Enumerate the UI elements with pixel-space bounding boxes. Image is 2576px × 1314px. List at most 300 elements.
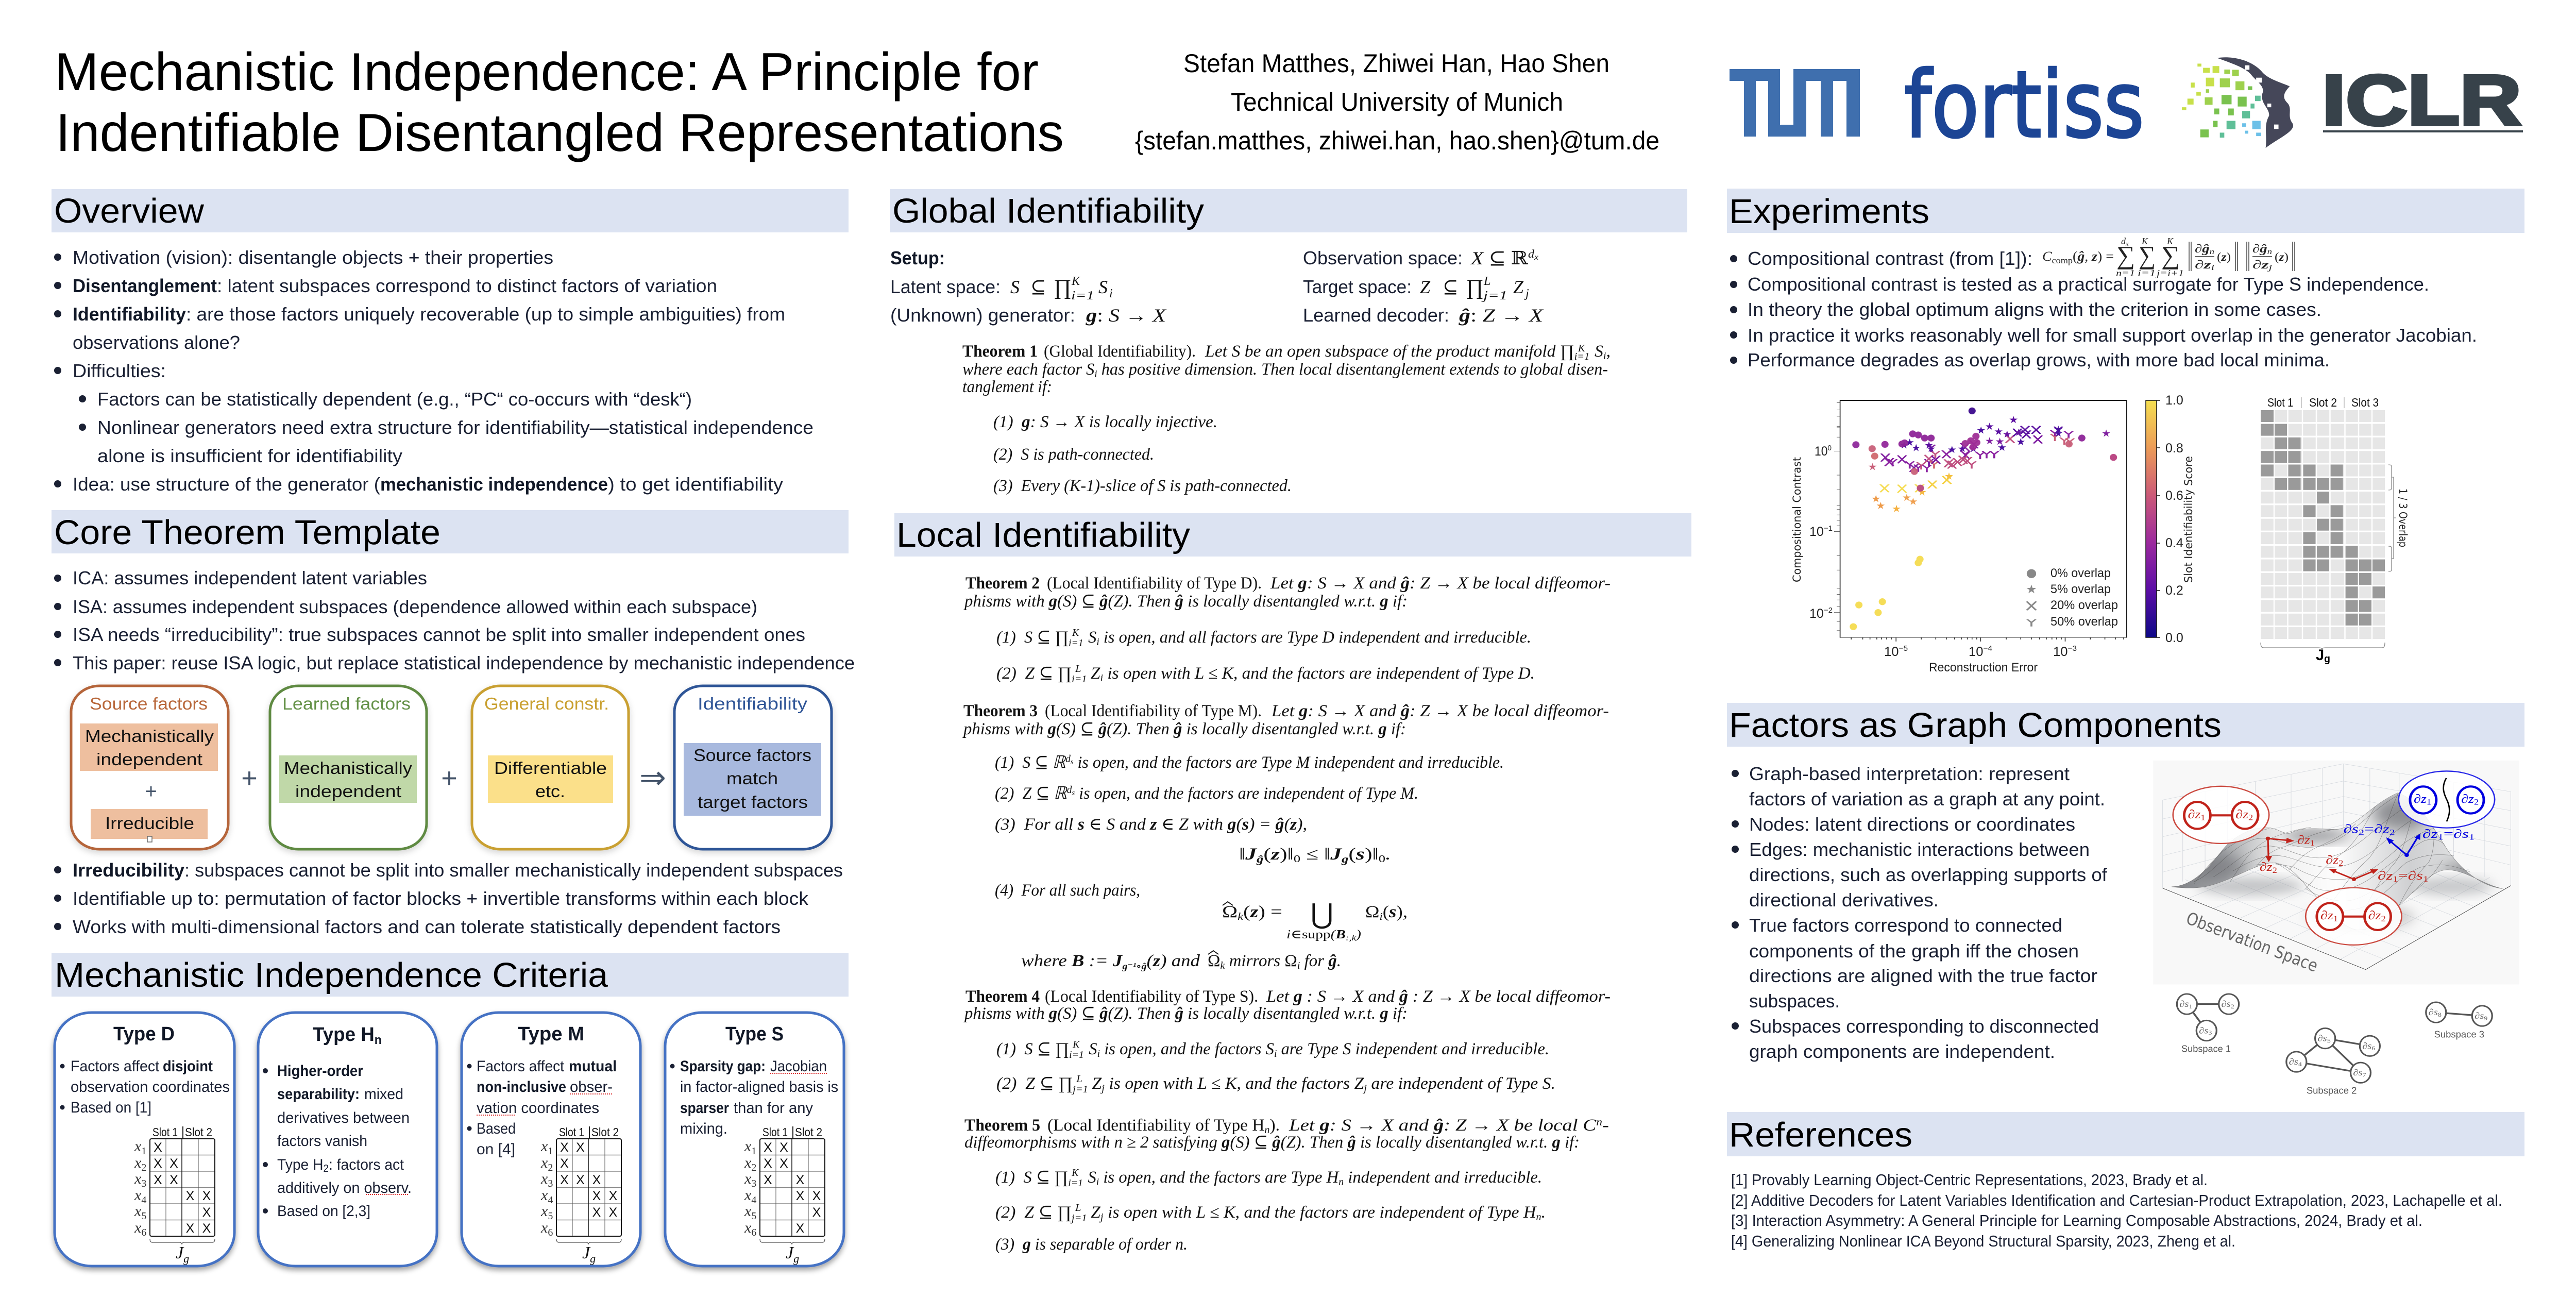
overview bullet list: Factors can be statistically dependent (e.g., “PC“ co-occurs with “desk“) [97,389,692,410]
red arrows and labels: ∂z [2297,833,2310,847]
theorem 3: Let g: S → X and ĝ: Z → X be local diffeomor- [1271,702,1609,720]
logo: TUM [1730,69,1860,137]
setup definitions: Setup: [890,247,945,268]
box: source factors [71,686,228,849]
jacobian matrix: type M: X [592,1189,601,1203]
jacobian matrix: type S: X [764,1156,772,1171]
markers: 5% overlap [1869,416,2110,512]
theorem 2: (1) S ⊆ ∏ [996,628,1070,647]
blue arrows and labels: = [2364,822,2374,836]
x axis tick labels: −5 [1899,644,1908,653]
jacobian matrix: type D: X [202,1221,211,1236]
theorem 4: is open with L ≤ K, and the factors Z [1105,1074,1364,1093]
setup definitions [890,247,1544,326]
theorem 5: (Local Identifiability of Type H [1047,1116,1262,1135]
formula: compositional contrast [2042,236,2295,278]
theorem 3: ( [1243,903,1250,921]
bullet list: ICA and ISA: This paper: reuse ISA logic, but replace statistical independence by mechanistic independence [73,652,855,673]
blue arrows and labels: ∂s [2453,827,2466,840]
jacobian matrix: type S: X [796,1221,805,1236]
setup definitions: X ⊆ ℝ [1471,248,1524,268]
bullet list: irreducibility: Identifiable up to: permutation of factor blocks + invertible transforms within each block [73,888,809,909]
jacobian matrix: type M: 2 [548,1162,553,1173]
card: type S: Jacobian [770,1058,827,1075]
label: observation space: Observation Space [2183,908,2321,976]
overview bullet list: observations alone? [73,332,240,353]
jacobian matrix: type M: X [560,1156,569,1171]
graph: subspace 1: 1 [2189,1003,2192,1010]
formula: compositional contrast: (z) [2275,250,2289,263]
jacobian matrix: type M: x [541,1187,548,1204]
jacobian matrix: type S: g [793,1252,799,1265]
theorem 5: (3) g is separable of order n. [995,1235,1188,1254]
theorem 1: where each factor S [962,360,1097,379]
theorem 5: K [1071,1167,1079,1178]
reference list: [1] Provably Learning Object-Centric Representations, 2023, Brady et al. [1731,1171,2208,1189]
theorem 4: j [1100,1083,1105,1094]
theorem 3: g [1341,854,1348,865]
blue arrows and labels: 1 [2469,833,2475,841]
reference list [1731,1171,2502,1250]
colorbar: slot identifiability score: 0.4 [2165,536,2183,550]
heading: experiments [1727,189,2524,233]
blue arrows and labels: 2 [2359,828,2364,837]
x axis tick labels: −3 [2067,644,2077,653]
theorem 3: ( [1147,952,1154,970]
jacobian matrix: type M [540,1124,621,1265]
setup definitions: ĝ: Z → X [1459,305,1544,326]
jacobian matrix: type D: x [134,1170,141,1187]
formula: compositional contrast: ( [2073,249,2077,264]
theorem 3: is open, and the factors are Type M independent and irreducible. [1074,753,1504,772]
setup definitions: Learned decoder: [1303,305,1449,326]
blue ring: disconnected graph: 1 [2427,798,2431,806]
panel: references [1727,1112,2524,1250]
jacobian matrix: type D: 5 [141,1210,146,1222]
red ring: connected graph front [2306,888,2402,945]
jacobian matrix: type D: x [134,1203,141,1220]
theorem 3: is open, and the factors are independent of Type M. [1075,784,1418,803]
theorem 4: Z [1088,1074,1102,1093]
authors and affiliation: Technical University of Munich [1231,88,1563,116]
theorem 5: Let g: S → X and ĝ: Z → X be local C [1289,1116,1573,1135]
theorem 2: i=1 [1069,637,1083,649]
card: type S: in factor-aligned basis is [680,1079,838,1096]
jacobian matrix: type D: x [134,1138,141,1155]
box: source factors: + [145,780,157,803]
theorem 3: ĝ [1256,854,1263,865]
title [55,42,1064,163]
blue ring: disconnected graph: ∂z [2461,792,2474,805]
experiments bullet list: Compositional contrast (from [1]): [1748,248,2032,269]
theorem 2: S [1084,628,1096,647]
theorem 5: is open, and the factors are Type H [1099,1168,1340,1187]
theorem 3: 0 [1379,853,1385,865]
box: identifiability: target factors [698,793,808,812]
formula: compositional contrast: n [2267,248,2272,256]
card: type H_n: 2 [324,1163,329,1174]
graph: subspace 2: 5 [2327,1037,2331,1044]
card: type S: Type S [725,1023,784,1045]
formula: compositional contrast: n=1 [2116,268,2135,278]
x axis tick labels: 10 [1969,645,1983,659]
graph: subspace 2: ∂s [2362,1041,2371,1051]
jacobian matrix: type M: x [541,1154,548,1171]
graph: subspace 2: ∂s [2318,1034,2327,1043]
setup definitions: ⊆ [1443,277,1458,297]
heading: overview: Overview [54,192,205,230]
theorem 3: for [1300,952,1328,970]
bullet list: irreducibility: Works with multi-dimensional factors and can tolerate statistically dependent factors [73,916,781,937]
chart: scatter plot of compositional contrast vs reconstruction error [1791,393,2195,675]
heading: core theorem template [52,510,849,553]
theorem 1: K [1578,343,1586,354]
heading: global identifiability: Global Identifiability [892,192,1205,230]
jacobian matrix: type D: g [183,1252,189,1265]
chart: generator jacobian support matrix [2261,396,2409,665]
card: type M: non-inclusive [477,1079,566,1096]
theorem 3: (3) For all s ∈ S and z ∈ Z with g(s) = ĝ(z), [995,815,1307,834]
theorem 4: j=1 [1071,1084,1088,1095]
card: type H_n: separability: [277,1086,360,1103]
theorem 1: (2) S is path-connected. [993,445,1154,464]
jacobian matrix: type S: 1 [751,1145,756,1157]
theorem 1: S [1590,342,1603,361]
heading: overview [52,189,849,232]
theorem 3: d [1067,784,1072,796]
box: learned factors: independent [295,782,401,801]
jacobian matrix: type M: X [560,1173,569,1187]
colorbar: slot identifiability score: Slot Identifiability Score [2182,456,2195,583]
markers: 20% overlap [1880,426,2042,493]
logo: ICLR: ICLR [2322,61,2521,140]
theorem 4: i [1274,1048,1277,1059]
box: general constraints [472,686,629,849]
slot headers [2267,396,2379,409]
box: identifiability: Source factors [693,746,811,765]
theorem 5: i [1096,1176,1099,1188]
jacobian matrix: type S: | [791,1124,794,1138]
red ring: connected graph front: ∂z [2320,908,2333,922]
theorem 2: L [1075,663,1081,675]
theorem 3: ĝ. [1328,952,1341,970]
overview bullet list: Disentanglement [73,275,217,296]
blue arrows and labels: ∂s [2343,822,2356,836]
graph: subspace 2: 7 [2363,1071,2366,1079]
formula: compositional contrast: ∂ z [2252,258,2266,271]
blue ring: disconnected graph [2399,771,2495,828]
jacobian matrix: type S: X [796,1189,805,1203]
setup definitions: i=1 [1071,289,1094,302]
jacobian matrix: type S: X [779,1140,788,1155]
theorem 3: Ω [1208,952,1220,970]
theorem 1: i=1 [1574,351,1589,362]
theorem 3: g⁻¹∘ĝ [1122,961,1147,971]
jacobian matrix: type S: Slot 1 [762,1125,788,1139]
theorem 3: s)‖ [1356,845,1375,864]
theorem 1: has positive dimension. Then local disentanglement extends to global disen- [1097,360,1608,379]
theorem 4: (Local Identifiability of Type S). [1045,987,1258,1006]
jacobian matrix: type S: x [744,1187,751,1204]
card: type S: than for any [734,1100,813,1117]
red arrows and labels: 1 [2393,874,2398,883]
jacobian matrix: type D: 3 [141,1178,146,1189]
jacobian matrix: type D: 2 [141,1162,146,1173]
theorem 5: n [1264,1124,1270,1136]
graph: subspace 1: ∂s [2199,1026,2208,1036]
legend labels: 0% overlap [2050,566,2111,580]
box: identifiability: Identifiability [698,694,808,713]
jacobian matrix: type M: Slot 1 [559,1125,584,1139]
jacobian matrix: type M: | [588,1124,591,1138]
theorem 3: k [1220,960,1225,971]
card: type M: Type M [518,1023,584,1045]
jacobian matrix: type D: X [170,1156,178,1171]
theorem 5: ). [1270,1116,1280,1135]
reference list: [4] Generalizing Nonlinear ICA Beyond Structural Sparsity, 2023, Zheng et al. [1731,1232,2235,1250]
graph: subspace 1: Subspace 1 [2181,1044,2231,1054]
formula: compositional contrast: ∑ [2139,241,2156,269]
wall and floor grid [2163,764,2511,959]
bullet list: ICA and ISA: ICA: assumes independent latent variables [73,567,427,588]
legend labels [2050,566,2118,629]
legend labels: 20% overlap [2050,598,2118,612]
box: source factors: Irreducible [105,814,194,833]
card: type H_n: mixed [364,1086,403,1103]
theorem 5: (2) Z ⊆ ∏ [995,1203,1070,1222]
panel: experiments [1727,189,2524,675]
surface mesh [2194,794,2470,917]
blue arrows and labels: ∂z [2422,827,2435,840]
theorem 2: (2) Z ⊆ ∏ [996,664,1071,683]
formula: compositional contrast: x [2125,240,2129,247]
theorem 1: Let S be an open subspace of the product manifold ∏ [1205,342,1567,361]
theorem 5: - [1602,1116,1609,1135]
bullet list: ICA and ISA: ISA: assumes independent subspaces (dependence allowed within each subspace) [73,596,757,617]
box: identifiability: match [726,769,778,788]
theorem 3: J [1330,845,1343,864]
card: type M: on [4] [477,1141,515,1158]
colorbar: slot identifiability score: 0.6 [2165,488,2183,503]
reference list: [2] Additive Decoders for Latent Variables Identification and Cartesian-Product Extrapolation, 2023, Lachapelle et al. [1731,1191,2502,1209]
theorem 2: Let g: S → X and ĝ: Z → X be local diffeomor- [1270,574,1611,593]
logo: fortiss: fortiss [1904,52,2144,158]
card: type H_n: n [375,1033,382,1047]
setup definitions: Latent space: [890,276,1001,297]
overview bullet list: : are those factors uniquely recoverable (up to simple ambiguities) from [186,304,785,325]
bullet list: ICA and ISA: ISA needs “irreducibility”: true subspaces cannot be split into smaller independent ones [73,624,805,645]
blue ring: disconnected graph: ∂z [2414,792,2427,805]
y axis tick labels: 10 [1809,607,1824,621]
jacobian matrix: type M: X [576,1140,585,1155]
theorem 1 [962,342,1611,495]
setup definitions: ∏ [1054,276,1072,299]
colorbar: slot identifiability score: 1.0 [2165,393,2183,408]
bottom brace and J_g label: J [2316,647,2325,664]
overview bullet list [54,247,814,495]
red arrows and labels [2260,833,2429,883]
authors and affiliation [1135,49,1659,155]
theorem 2: K [1072,627,1080,638]
theorem 5 [964,1116,1609,1254]
panel: global identifiability [890,189,1687,495]
theorem 3: Ω [1365,903,1379,921]
overview bullet list: Difficulties: [73,360,166,381]
jacobian matrix: type M: x [541,1203,548,1220]
setup definitions: S [1010,277,1020,297]
card: type H_n: Based on [2,3] [277,1203,370,1220]
graph interpretation bullet list: Edges: mechanistic interactions between [1749,839,2090,860]
colorbar: slot identifiability score: 0.2 [2165,583,2183,598]
theorem 2 [963,574,1611,685]
card: type H_n: : factors act [329,1156,404,1173]
red arrows and labels: ∂z [2378,869,2391,883]
card: type H_n: derivatives between [277,1109,410,1126]
slot headers: Slot 2 [2309,396,2337,409]
theorem 3: ( [1263,845,1271,864]
theorem 4: are independent of Type S. [1367,1074,1555,1093]
jacobian matrix: type S: 4 [751,1194,756,1206]
graph interpretation bullet list: Graph-based interpretation: represent [1749,763,2070,784]
theorem 4: phisms with g(S) ⊆ ĝ(Z). Then ĝ is locally disentangled w.r.t. g if: [963,1004,1408,1023]
formula: compositional contrast: K [2166,236,2174,246]
overview bullet list: Identifiability [73,304,186,325]
experiments bullet list: In theory the global optimum aligns with the criterion in some cases. [1748,299,2321,320]
setup definitions: K [1071,275,1081,288]
theorem 5: L [1075,1202,1081,1214]
panel: mechanistic independence criteria [52,953,849,1266]
red arrows and labels: 2 [2338,858,2343,868]
theorem 2: i [1096,636,1099,648]
theorem 5: . [1541,1203,1546,1222]
theorem 3: :,k [1346,934,1357,942]
theorem 1: (3) Every (K-1)-slice of S is path-connected. [993,477,1292,495]
card: type M: vation coordinates [477,1100,599,1117]
theorem 3: (4) For all such pairs, [995,881,1140,900]
setup definitions: ∏ [1466,276,1484,299]
theorem 3: Ω [1284,952,1297,970]
red ring: connected graph left: ∂z [2188,807,2200,821]
setup definitions: ⊆ [1030,277,1046,297]
theorem 3: (1) S ⊆ ℝ [995,753,1068,772]
theorem 4: K [1072,1039,1080,1050]
x axis tick labels: 10 [2053,645,2067,659]
theorem 4 [963,987,1611,1095]
theorem 3: (2) Z ⊆ ℝ [995,784,1069,803]
theorem 2: is open, and all factors are Type D independent and irreducible. [1099,628,1531,647]
x axis label: Reconstruction Error [1929,661,2038,675]
graph interpretation bullet list: True factors correspond to connected [1749,915,2062,936]
theorem 3: ⋃ [1311,898,1333,930]
graph: subspace 3: ∂s [2475,1011,2484,1021]
jacobian matrix: type D: x [134,1219,141,1236]
theorem 2: i [1100,672,1103,684]
formula: compositional contrast: j=i+1 [2156,268,2184,278]
theorem 3: Theorem 3 [963,702,1038,720]
graph: subspace 3 [2426,1002,2492,1040]
title: Mechanistic Independence: A Principle for [55,42,1039,102]
setup definitions: L [1483,275,1490,288]
graph interpretation bullet list: directions are aligned with the true factor [1749,965,2097,986]
panel: overview [52,189,849,495]
card: type H_n: Type H [313,1024,377,1046]
x axis tick labels: −4 [1983,644,1992,653]
red ring: connected graph front: 2 [2381,914,2386,923]
jacobian matrix: type M: x [541,1138,548,1155]
jacobian matrix: type M: J [582,1243,590,1262]
heading: local identifiability [894,513,1691,557]
formula: compositional contrast: (z) [2217,250,2231,263]
authors and affiliation: Stefan Matthes, Zhiwei Han, Hao Shen [1183,49,1609,78]
box: source factors: independent [96,750,202,769]
jacobian matrix: type D: 6 [141,1227,146,1238]
card: type M: obser- [570,1079,613,1096]
implies arrow: ⇒ [639,759,666,796]
jacobian matrix: type M: X [576,1173,585,1187]
theorem 2: Theorem 2 [965,574,1040,593]
colorbar: slot identifiability score: 0.8 [2165,441,2183,456]
heading: global identifiability [890,189,1687,232]
formula: compositional contrast: j [2267,264,2272,272]
heading: criteria [52,953,849,997]
card: type H_n: factors vanish [277,1133,367,1150]
theorem 5: Theorem 5 [964,1116,1040,1135]
theorem 3: where B := J [1021,952,1122,970]
graph interpretation bullet list: components of the graph iff the chosen [1749,940,2079,962]
jacobian matrix: type S: X [779,1156,788,1171]
setup definitions: d [1528,247,1535,260]
formula: compositional contrast: i=1 [2138,268,2156,278]
scatter axes and markers [1834,400,2127,642]
formula: compositional contrast: C [2042,249,2051,264]
card: type S: sparser [680,1100,729,1117]
card: type M: Factors affect [477,1058,565,1075]
setup definitions: j [1524,287,1529,300]
bottom brace and J_g label [2261,643,2385,665]
heading: factors as graph components: Factors as Graph Components [1729,706,2222,745]
jacobian matrix: type D: | [181,1124,184,1138]
theorem 1: Theorem 1 [962,342,1038,361]
overview bullet list: : latent subspaces correspond to distinct factors of variation [217,275,717,296]
y axis tick labels: 10 [1809,525,1824,539]
jacobian matrix: type M: 4 [548,1194,553,1206]
jacobian matrix: type D: J [176,1243,183,1262]
brace and overlap label [2388,465,2409,571]
legend labels: 5% overlap [2050,582,2111,596]
card: type H_n: additively on observ. [277,1180,412,1197]
theorem 2: Z [1087,664,1100,683]
jacobian matrix: type S: J [786,1243,793,1262]
experiments bullet list: Performance degrades as overlap grows, with more bad local minima. [1748,349,2330,370]
jacobian matrix: type M: X [560,1140,569,1155]
reference list: [3] Interaction Asymmetry: A General Principle for Learning Composable Abstractions, 2024, Brady et al. [1731,1211,2422,1229]
legend labels: 50% overlap [2050,615,2118,629]
theorem 3: i [1379,911,1383,922]
card: type S: mixing. [680,1120,727,1137]
graph interpretation bullet list: Nodes: latent directions or coordinates [1749,814,2075,835]
y axis tick labels: −1 [1824,524,1833,533]
jacobian matrix: type S: 2 [751,1162,756,1173]
jacobian matrix: type S: x [744,1219,751,1236]
theorem 5: j [1099,1211,1104,1223]
theorem 3 [962,702,1609,971]
theorem 2: phisms with g(S) ⊆ ĝ(Z). Then ĝ is locally disentangled w.r.t. g if: [963,592,1408,611]
box: general constraints: etc. [535,782,565,801]
graph: subspace 1: ∂s [2222,999,2231,1009]
theorem 3: s [1072,789,1075,797]
theorem 3: . [1385,845,1391,864]
formula: compositional contrast: ∂ z [2195,258,2209,271]
